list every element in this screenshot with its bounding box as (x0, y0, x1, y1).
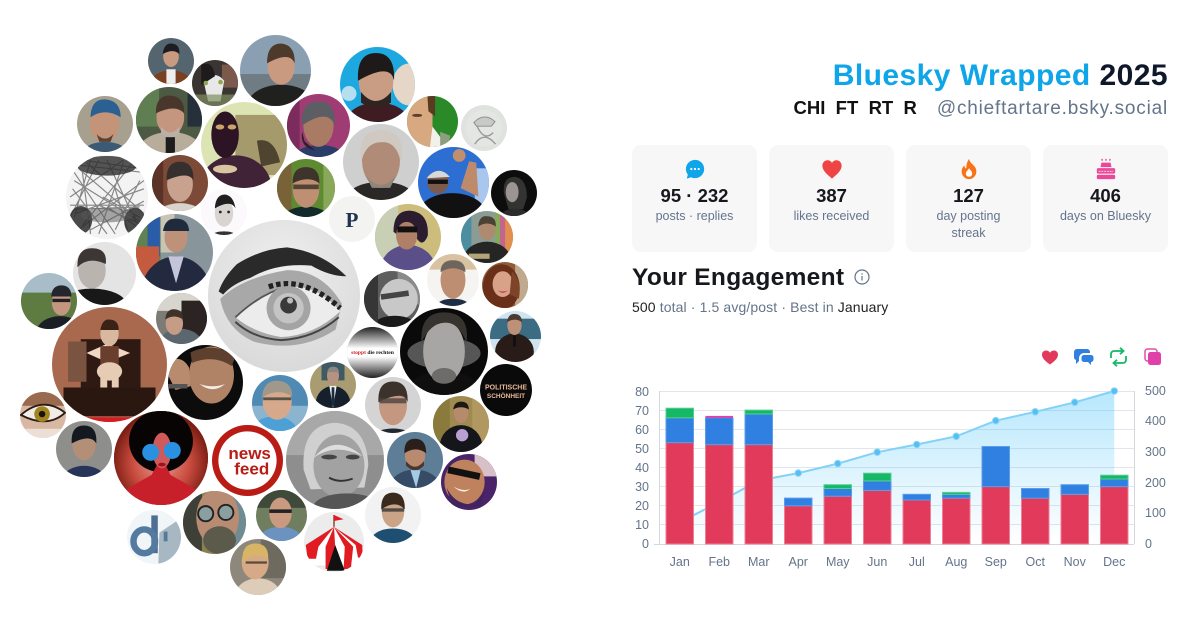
stat value: 406 (1090, 185, 1121, 206)
month labels: Sep (985, 555, 1007, 569)
icon: info (854, 269, 870, 285)
right axis labels: 500 (1145, 384, 1166, 398)
legend: reposts (1111, 348, 1126, 366)
avatar: blonde woman with glasses (230, 539, 286, 595)
avatar: steam train man (156, 293, 207, 344)
avatar: letter d sculpture (127, 510, 181, 564)
avatar: smiling man in blue cap (77, 96, 133, 152)
right axis labels (1145, 384, 1166, 551)
avatar: man with striped background (461, 211, 513, 263)
month labels: Mar (748, 555, 770, 569)
avatar: news feed logo: news (228, 444, 271, 463)
right axis labels: 0 (1145, 537, 1152, 551)
stacked bars: reposts (666, 408, 1128, 494)
engagement summary: 500 total · 1.5 avg/post · Best in January (632, 299, 888, 315)
icon: flame (962, 159, 976, 180)
right axis labels: 100 (1145, 506, 1166, 520)
avatar: news feed logo (212, 425, 283, 496)
stat value: 127 (953, 185, 984, 206)
legend: quotes (1145, 349, 1161, 365)
avatar: man in black tee (433, 396, 489, 452)
avatar: suited man in building (310, 362, 356, 408)
avatar: engraved coin (461, 105, 507, 151)
avatar: afro woman with blue glasses (114, 411, 208, 505)
avatar: man by bridge (240, 35, 311, 106)
avatar: sketch portrait (201, 189, 247, 235)
left axis labels: 70 (635, 404, 649, 418)
left axis labels (635, 385, 649, 551)
avatar: man on sky background (340, 47, 415, 122)
avatar: grinning man on black (168, 345, 243, 420)
icon: heart (822, 160, 842, 178)
avatar: man with glasses in forest (277, 159, 335, 217)
avatar: man with glasses, grey background (365, 377, 421, 433)
left axis labels: 50 (635, 442, 649, 456)
avatar cluster (20, 35, 541, 595)
avatar: letter P: P (346, 208, 359, 232)
avatar: large black and white man (400, 308, 488, 395)
avatar: bearded man in blue jacket (387, 432, 443, 488)
avatar: grey-haired man (343, 124, 419, 200)
icon: chat bubble (686, 160, 704, 179)
stacked bars: replies (666, 414, 1128, 506)
chart legend icons (1042, 347, 1161, 367)
avatar: dark portrait of woman (491, 170, 537, 216)
avatar: man half face, green background (407, 96, 458, 147)
month labels: May (826, 555, 850, 569)
avatar: stoppt die rechten (347, 327, 398, 378)
avatar: man waving, blue sky (418, 147, 489, 218)
avatar: man with cap and glasses, city view (21, 273, 77, 329)
avatar: man in suit, EU flag (136, 214, 213, 291)
stat card: posting streak (906, 145, 1031, 252)
avatar: older man, tan background (427, 254, 479, 306)
user name and handle: CHI FT RT R @chieftartare.bsky.social (794, 97, 1168, 119)
month labels: Apr (789, 555, 808, 569)
month labels: Jun (867, 555, 887, 569)
avatar: laughing older man, black and white (364, 271, 420, 327)
stat label (937, 209, 1000, 240)
avatar: woman in sunglasses (375, 204, 441, 270)
avatar: letter P (329, 196, 375, 242)
chart: engagement by month (635, 384, 1166, 569)
left axis labels: 60 (635, 423, 649, 437)
cumulative area and line (680, 388, 1118, 544)
stat card: days on Bluesky (1043, 145, 1168, 252)
month labels: Jan (670, 555, 690, 569)
month labels: Jul (909, 555, 925, 569)
right axis labels: 400 (1145, 414, 1166, 428)
avatar: man in brown jacket (148, 38, 194, 84)
heading: Your Engagement: Your Engagement (632, 264, 844, 291)
avatar: bearded man with round glasses (183, 491, 246, 554)
left axis labels: 40 (635, 461, 649, 475)
avatar: stoppt die rechten: stoppt die rechten (351, 350, 395, 356)
month labels: Nov (1064, 555, 1087, 569)
avatar: bearded man in beige jacket (136, 87, 202, 153)
avatar: man on pink background (287, 94, 350, 157)
avatar: cat (192, 60, 238, 106)
month labels: Dec (1103, 555, 1125, 569)
avatar: politische schonheit: POLITISCHE (485, 384, 527, 391)
left axis labels: 20 (635, 499, 649, 513)
left axis labels: 0 (642, 537, 649, 551)
avatar: bald man with glasses (256, 490, 307, 541)
legend: replies (1074, 349, 1094, 365)
avatar: news feed logo: feed (234, 460, 269, 479)
avatar: circus tent (304, 512, 364, 572)
avatar: balaclava (201, 102, 287, 188)
avatar: smiling redhead (482, 262, 528, 308)
avatar: laughing man, purple (441, 454, 497, 510)
left axis labels: 80 (635, 385, 649, 399)
stat label: likes received (794, 209, 869, 223)
stat card: likes (769, 145, 894, 252)
stat value: 387 (816, 185, 847, 206)
month labels: Feb (708, 555, 730, 569)
left axis labels: 10 (635, 518, 649, 532)
title: Bluesky Wrapped 2025 (833, 59, 1168, 92)
stat value: 95 · 232 (661, 185, 728, 206)
stat label: streak (951, 226, 986, 240)
avatar: hand-drawn eye, largest circle (208, 220, 360, 372)
month labels (670, 555, 1125, 569)
avatar: blonde woman black and white (286, 411, 384, 509)
avatar: speaker with microphone (490, 311, 541, 362)
right axis labels: 300 (1145, 445, 1166, 459)
stacked bars: likes (666, 443, 1128, 544)
month labels: Oct (1026, 555, 1045, 569)
avatar: black and white man (73, 242, 136, 305)
stat label: posts · replies (656, 209, 733, 223)
avatar: man in blue shirt with glasses (252, 375, 308, 431)
avatar: politische schonheit (480, 364, 532, 416)
avatar: eye close-up (20, 392, 66, 438)
avatar: network graph (66, 155, 148, 239)
avatar: man with brown background (152, 155, 208, 211)
avatar: vintage sepia child photo (52, 307, 167, 422)
right axis labels: 200 (1145, 476, 1166, 490)
stat label: days on Bluesky (1060, 209, 1151, 223)
avatar: young man with glasses, blue polo (365, 487, 421, 543)
stat card: posts and replies (632, 145, 757, 252)
avatar: politische schonheit: SCHÖNHEIT (487, 391, 525, 400)
stat label: day posting (937, 209, 1000, 223)
left axis labels: 30 (635, 480, 649, 494)
stacked bars: quotes (706, 416, 733, 418)
month labels: Aug (945, 555, 967, 569)
legend: likes (1042, 350, 1058, 364)
icon: birthday cake (1096, 158, 1116, 180)
avatar: young man in jumper (56, 421, 112, 477)
